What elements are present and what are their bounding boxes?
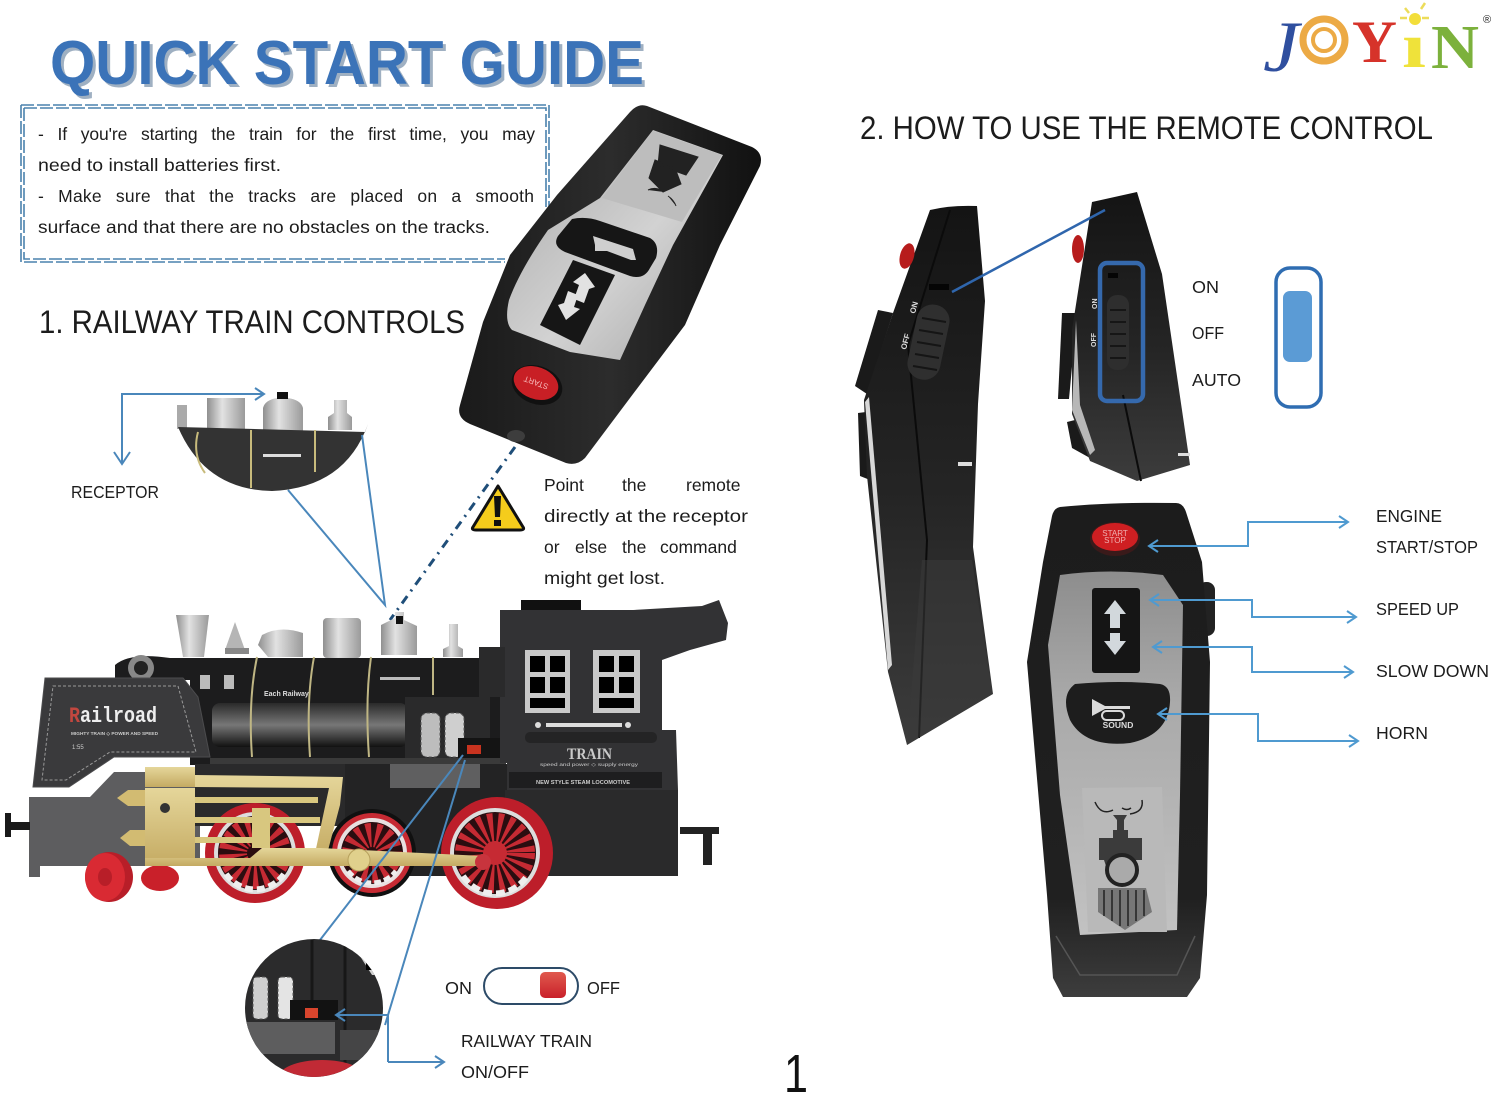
- callout: slow down: SLOW DOWN: [1376, 661, 1489, 681]
- logo: Joyin: N: [1431, 14, 1479, 82]
- logo: Joyin: ®: [1483, 14, 1491, 26]
- callout: horn: [1158, 714, 1428, 743]
- mode slider icon: [1276, 268, 1321, 407]
- remote side view, right: ON: [1092, 298, 1099, 309]
- dash-dot signal line from remote to receptor: [390, 447, 515, 620]
- receptor zoom inset: [177, 392, 368, 491]
- gold cylinders and rods: [117, 767, 491, 871]
- small leading wheels: [85, 852, 179, 902]
- locomotive: [5, 600, 728, 909]
- remote control, angled view: [459, 105, 761, 464]
- receptor label: RECEPTOR: [71, 482, 159, 502]
- receptor callout arrow: [122, 394, 264, 464]
- lower frame: [5, 764, 719, 877]
- train print panel: [1082, 787, 1167, 932]
- mode labels: AUTO: [1192, 370, 1241, 390]
- boiler: [115, 655, 506, 765]
- front plate: 1:55: [72, 745, 84, 751]
- start stop button: [1090, 522, 1140, 556]
- speed buttons: [1092, 588, 1140, 673]
- mode labels: ON: [1192, 277, 1219, 297]
- cab: [479, 600, 728, 790]
- label: railway train on/off: ON/OFF: [461, 1062, 529, 1082]
- callout: engine start/stop: START/STOP: [1376, 537, 1478, 557]
- warning text: Point: [544, 475, 584, 495]
- mode labels: [1192, 277, 1241, 390]
- remote side view, right: [1058, 192, 1190, 481]
- on/off callout arrow: [336, 1015, 388, 1062]
- callout: slow down: [1153, 647, 1489, 681]
- boiler: Each Railway: [264, 691, 309, 698]
- warning text: the: [622, 537, 646, 557]
- start stop button: START: [1102, 529, 1128, 538]
- remote side view, left: [855, 206, 993, 745]
- warning text: directly at the receptor: [544, 506, 748, 526]
- logo: Joyin: ı: [1402, 10, 1426, 81]
- start stop button: STOP: [1104, 536, 1126, 545]
- heading: section 2: 2. HOW TO USE THE REMOTE CONTROL: [860, 110, 1433, 146]
- instruction note box: surface and that there are no obstacles on the tracks.: [38, 217, 490, 237]
- connector between side views: [952, 210, 1105, 292]
- rear driving wheel: [441, 797, 553, 909]
- warning icon: [472, 486, 524, 530]
- label: OFF: OFF: [587, 978, 620, 998]
- callout: engine start/stop: ENGINE: [1376, 506, 1442, 526]
- right window: [593, 650, 640, 713]
- logo: Joyin: [1263, 3, 1491, 87]
- front plate: [33, 678, 210, 787]
- on/off switch zoom inset: [245, 939, 383, 1077]
- switch pointer lines: [320, 755, 465, 1025]
- warning text: else: [575, 537, 607, 557]
- highlight around slider: [1100, 263, 1143, 401]
- warning text: might get lost.: [544, 568, 665, 588]
- on/off slider icon: [484, 968, 578, 1004]
- callout: horn: HORN: [1376, 723, 1428, 743]
- remote silver face: [507, 130, 723, 360]
- front driving wheel: [205, 803, 305, 903]
- warning text: remote: [686, 475, 740, 495]
- remote side view, right: OFF: [1091, 332, 1098, 347]
- callout: speed up: [1150, 599, 1459, 619]
- warning text: the: [622, 475, 646, 495]
- remote front view: [1027, 503, 1215, 997]
- front remote silver face: [1048, 572, 1183, 935]
- label: railway train on/off: [461, 1031, 592, 1082]
- title: QUICK START GUIDE: [53, 32, 647, 101]
- callout: speed up: SPEED UP: [1376, 599, 1459, 619]
- cab: TRAIN: [567, 746, 612, 763]
- receptor pointer lines: [288, 435, 385, 605]
- label: railway train on/off: RAILWAY TRAIN: [461, 1031, 592, 1051]
- on/off callout arrow lower: [388, 1061, 444, 1063]
- remote start stop button: [506, 358, 568, 412]
- receptor arrow down head: [114, 452, 130, 464]
- left window: [525, 650, 570, 713]
- horn button: SOUND: [1103, 720, 1133, 730]
- cab: NEW STYLE STEAM LOCOMOTIVE: [536, 780, 630, 786]
- cab: speed and power ◇ supply energy: [540, 762, 639, 767]
- logo: Joyin: J: [1263, 7, 1302, 87]
- instruction note box: - If you're starting the train for the first time, you may: [38, 124, 535, 144]
- front plate: Railroad: [69, 704, 157, 729]
- label: ON: ON: [445, 978, 472, 998]
- warning text: command: [660, 537, 737, 557]
- remote side view, left: OFF: [899, 333, 912, 351]
- logo: Joyin: Y: [1352, 9, 1397, 75]
- horn button: [1066, 682, 1170, 744]
- heading: section 1: 1. RAILWAY TRAIN CONTROLS: [39, 304, 465, 340]
- front plate: MIGHTY TRAIN ◇ POWER AND SPEED: [71, 731, 159, 736]
- title: QUICK START GUIDE: [50, 29, 644, 98]
- warning text: or: [544, 537, 560, 557]
- instruction note box: - Make sure that the tracks are placed on a smooth: [38, 186, 534, 206]
- remote side view, left: ON: [908, 300, 920, 315]
- warning text: [544, 475, 748, 588]
- instruction note box: need to install batteries first.: [38, 155, 281, 175]
- chimney and domes: [176, 612, 463, 658]
- remote sound button: [556, 218, 657, 277]
- remote start stop button: START: [523, 374, 550, 391]
- instruction note box: [21, 105, 549, 262]
- remote picture panel: [602, 131, 722, 222]
- middle driving wheel: [328, 809, 416, 897]
- mode labels: OFF: [1192, 323, 1224, 343]
- callout: engine start/stop: [1149, 506, 1478, 557]
- remote arrow buttons: [540, 260, 615, 345]
